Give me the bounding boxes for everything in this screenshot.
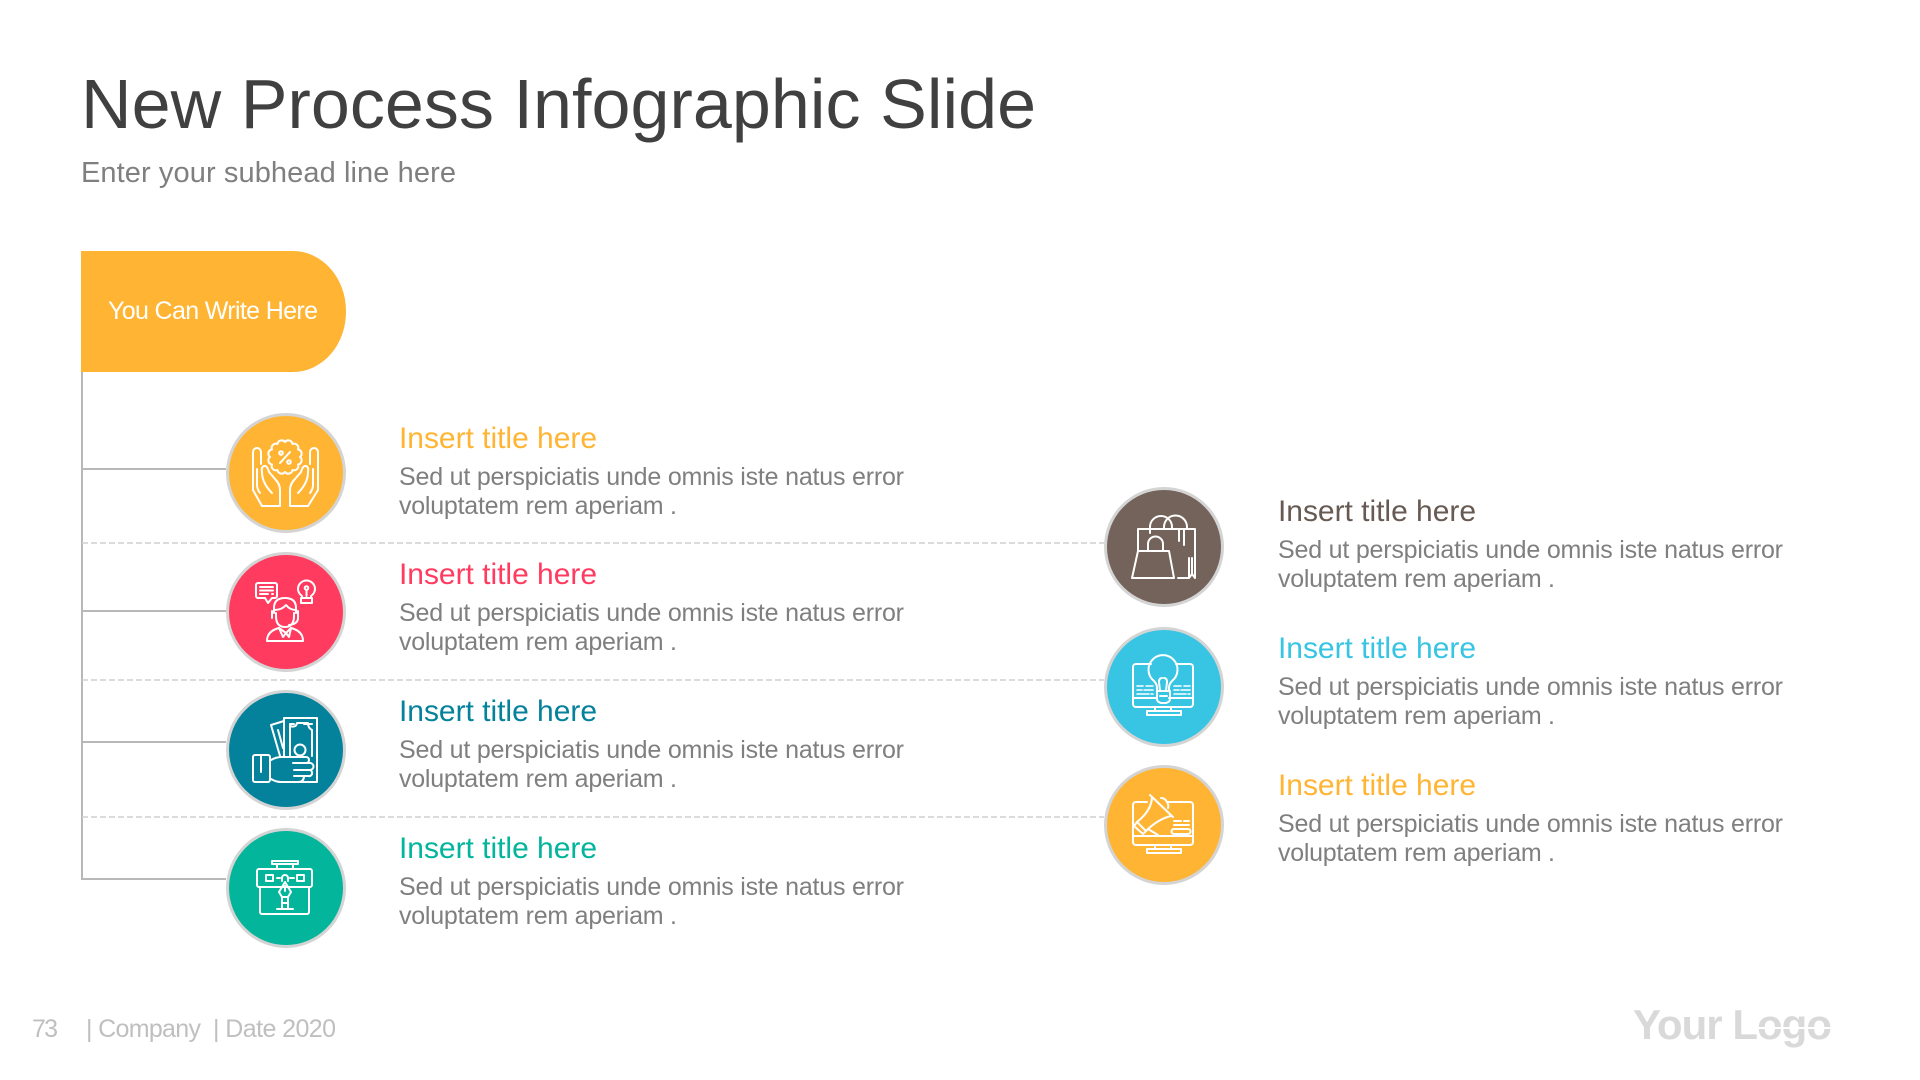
text: item 1: [399, 422, 904, 520]
subhead: Enter your subhead line here: [81, 157, 456, 189]
text: item 3: [399, 695, 904, 793]
text: item 1: Insert title here: [399, 422, 597, 455]
text: item 5: Sed ut perspiciatis unde omnis iste natus error: [1278, 536, 1783, 564]
icon: hand holding cash: [228, 692, 344, 808]
icon: monitor with light bulb: [1106, 628, 1222, 746]
icon: support agent with speech bubble and bulb: [228, 554, 344, 670]
text: item 6: voluptatem rem aperiam .: [1278, 702, 1555, 730]
footer: 73: [32, 1015, 58, 1043]
text: item 5: Insert title here: [1278, 495, 1476, 528]
text: item 4: Insert title here: [399, 832, 597, 865]
text: item 2: Sed ut perspiciatis unde omnis iste natus error: [399, 599, 904, 627]
icon: briefcase with pen nib: [228, 830, 344, 946]
text: item 6: Insert title here: [1278, 632, 1476, 665]
icon: hands with discount badge: [228, 414, 344, 532]
header tab: [81, 251, 346, 372]
text: item 7: voluptatem rem aperiam .: [1278, 839, 1555, 867]
icon: shopping bags: [1106, 488, 1222, 606]
text: item 2: voluptatem rem aperiam .: [399, 628, 677, 656]
text: item 3: Sed ut perspiciatis unde omnis iste natus error: [399, 736, 904, 764]
footer: | Company: [86, 1015, 202, 1043]
text: item 5: voluptatem rem aperiam .: [1278, 565, 1555, 593]
text: item 1: voluptatem rem aperiam .: [399, 492, 677, 520]
header tab: You Can Write Here: [108, 297, 318, 325]
text: item 6: [1278, 632, 1783, 730]
text: item 4: voluptatem rem aperiam .: [399, 902, 677, 930]
icon: monitor with megaphone: [1106, 766, 1222, 884]
text: item 7: Sed ut perspiciatis unde omnis iste natus error: [1278, 810, 1783, 838]
text: item 2: Insert title here: [399, 558, 597, 591]
text: item 4: [399, 832, 904, 930]
logo: Your Logo: [1633, 1001, 1832, 1048]
text: item 3: voluptatem rem aperiam .: [399, 765, 677, 793]
text: item 2: [399, 558, 904, 656]
footer: [32, 1015, 336, 1043]
text: item 7: Insert title here: [1278, 769, 1476, 802]
text: item 4: Sed ut perspiciatis unde omnis iste natus error: [399, 873, 904, 901]
text: item 1: Sed ut perspiciatis unde omnis iste natus error: [399, 463, 904, 491]
text: item 5: [1278, 495, 1783, 593]
text: item 3: Insert title here: [399, 695, 597, 728]
title: New Process Infographic Slide: [81, 65, 1036, 143]
text: item 6: Sed ut perspiciatis unde omnis iste natus error: [1278, 673, 1783, 701]
text: item 7: [1278, 769, 1783, 867]
footer: | Date 2020: [213, 1015, 336, 1043]
